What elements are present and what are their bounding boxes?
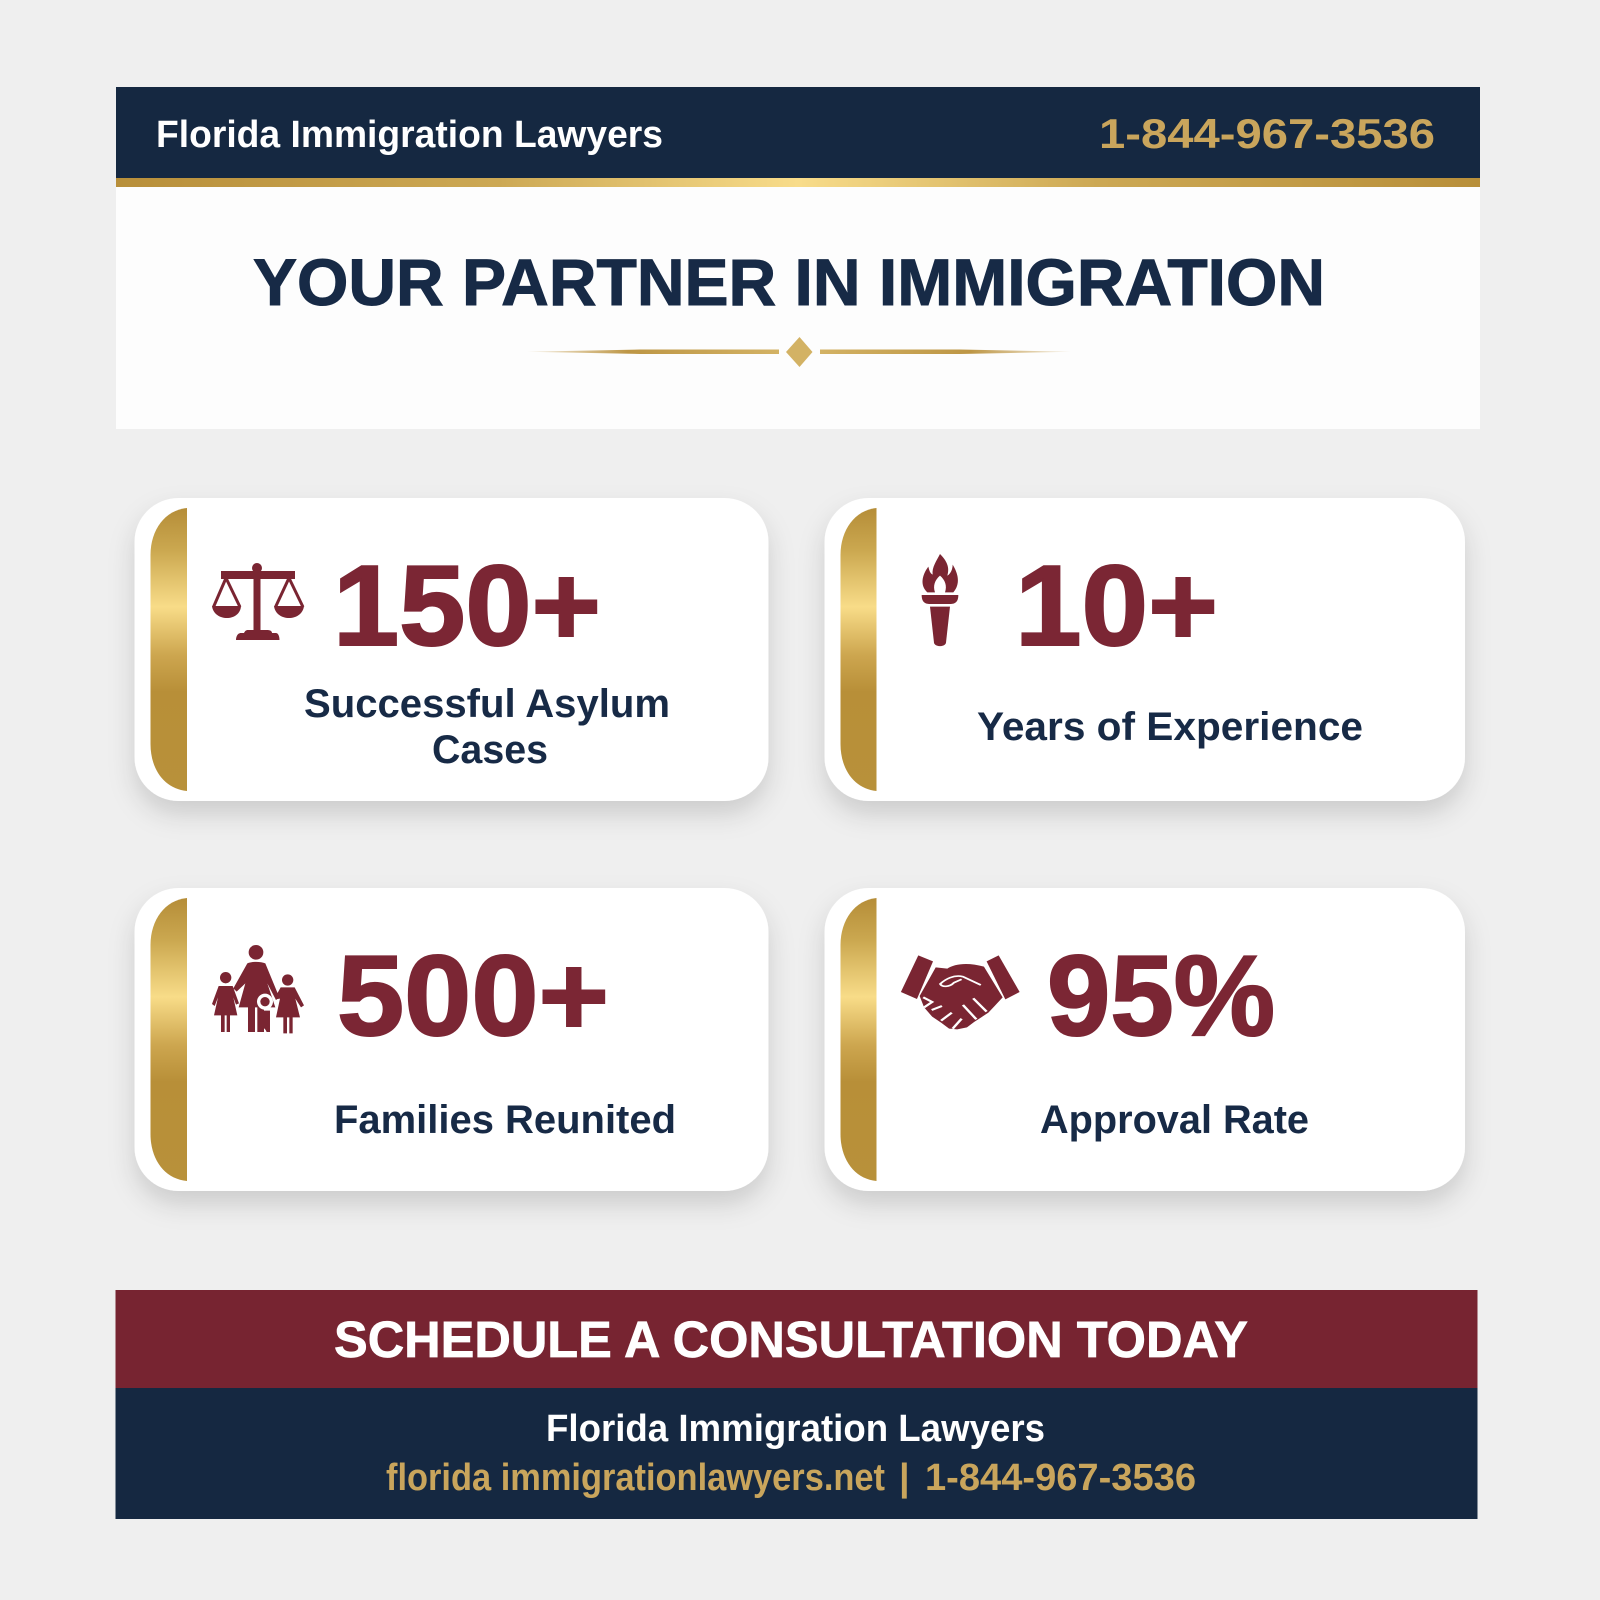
gold accent xyxy=(840,508,876,791)
gold accent xyxy=(150,898,187,1181)
stat number: 95% xyxy=(1047,933,1275,1060)
footer website and phone: 1-844-967-3536 xyxy=(925,1457,1196,1499)
stat card: asylum cases xyxy=(134,498,768,801)
gold accent xyxy=(840,898,876,1181)
stat number: 150+ xyxy=(333,543,601,670)
footer firm name: Florida Immigration Lawyers xyxy=(546,1408,1045,1450)
footer website and phone: | xyxy=(899,1457,910,1499)
stat number: 10+ xyxy=(1015,543,1218,670)
gold rule xyxy=(116,178,1480,187)
footer website and phone xyxy=(386,1457,1196,1499)
stat card: approval rate xyxy=(824,888,1465,1191)
header bar xyxy=(116,87,1480,179)
stat label: Families Reunited xyxy=(334,1098,676,1142)
icon: scales of justice xyxy=(212,563,304,640)
footer website and phone: florida immigrationlawyers.net xyxy=(386,1457,885,1499)
stat number: 500+ xyxy=(337,933,609,1060)
stat label: Cases xyxy=(432,728,548,772)
gold accent xyxy=(150,508,187,791)
stat label: Successful Asylum xyxy=(304,682,670,726)
icon: handshake xyxy=(901,955,1020,1029)
icon: family xyxy=(212,945,304,1033)
stat label: Approval Rate xyxy=(1040,1098,1309,1142)
title: YOUR PARTNER IN IMMIGRATION xyxy=(253,245,1325,319)
stat label: Years of Experience xyxy=(977,705,1363,749)
title panel xyxy=(116,187,1480,429)
footer contact bar xyxy=(116,1388,1478,1519)
stat label xyxy=(304,682,670,772)
title divider with diamond xyxy=(527,337,1071,367)
call to action banner xyxy=(116,1290,1478,1388)
header phone number: 1-844-967-3536 xyxy=(1099,110,1435,157)
stat card: years of experience xyxy=(824,498,1465,801)
icon: torch xyxy=(922,554,958,646)
stat card: families reunited xyxy=(134,888,768,1191)
header firm name: Florida Immigration Lawyers xyxy=(156,114,663,156)
call to action text: SCHEDULE A CONSULTATION TODAY xyxy=(334,1311,1248,1368)
